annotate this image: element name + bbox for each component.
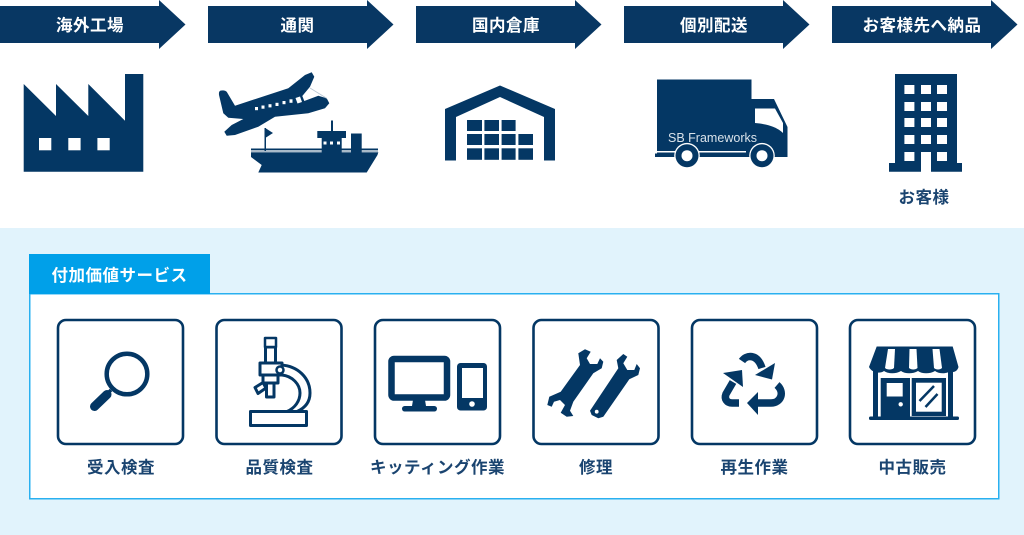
- service card: 再生作業: 再生作業: [720, 458, 788, 477]
- icon: airplane and ship: [219, 72, 378, 172]
- service card: 品質検査: [216, 320, 342, 477]
- arrow: 個別配送: [624, 0, 810, 49]
- arrow: 個別配送: 個別配送: [680, 16, 748, 35]
- service card: 中古販売: 中古販売: [878, 458, 946, 477]
- arrow: 通関: 通関: [280, 16, 314, 35]
- arrow: 国内倉庫: [416, 0, 602, 49]
- label: お客様: お客様: [898, 187, 950, 207]
- panel: services box: [30, 294, 999, 499]
- ship: [251, 120, 378, 172]
- service card: キッティング作業: [370, 320, 505, 477]
- arrow: 海外工場: 海外工場: [56, 16, 124, 35]
- icon: warehouse: [445, 86, 555, 160]
- service card: 修理: [534, 320, 658, 477]
- service card: キッティング作業: キッティング作業: [370, 457, 505, 477]
- icon: storefront: [869, 346, 959, 420]
- airplane: [219, 72, 329, 136]
- service card: 受入検査: 受入検査: [87, 458, 155, 477]
- icon: wrenches: [547, 349, 640, 418]
- heading tab: 付加価値サービス: 付加価値サービス: [52, 265, 188, 285]
- icon: recycle arrows: [723, 357, 781, 415]
- icon: microscope: [250, 338, 310, 426]
- arrow: 通関: [208, 0, 394, 49]
- service card: 中古販売: [850, 320, 975, 477]
- service card: 品質検査: 品質検査: [246, 458, 314, 477]
- service card: 受入検査: [58, 320, 183, 477]
- icon: monitor and smartphone: [392, 359, 487, 412]
- panel: value-added services background: [0, 228, 1024, 535]
- arrow: お客様先へ納品: お客様先へ納品: [862, 15, 982, 35]
- icon: factory: [24, 74, 143, 172]
- arrow: 海外工場: [0, 0, 186, 49]
- icon: delivery truck: [655, 80, 788, 168]
- service card: 修理: 修理: [579, 458, 613, 477]
- heading tab: 付加価値サービス: [29, 254, 210, 294]
- arrow: 国内倉庫: 国内倉庫: [472, 15, 540, 35]
- arrow: お客様先へ納品: [832, 0, 1018, 49]
- truck logo text: SB Frameworks: [668, 130, 757, 145]
- icon: office building: [889, 74, 962, 172]
- service card: 再生作業: [692, 320, 817, 477]
- icon: magnifier: [94, 354, 147, 406]
